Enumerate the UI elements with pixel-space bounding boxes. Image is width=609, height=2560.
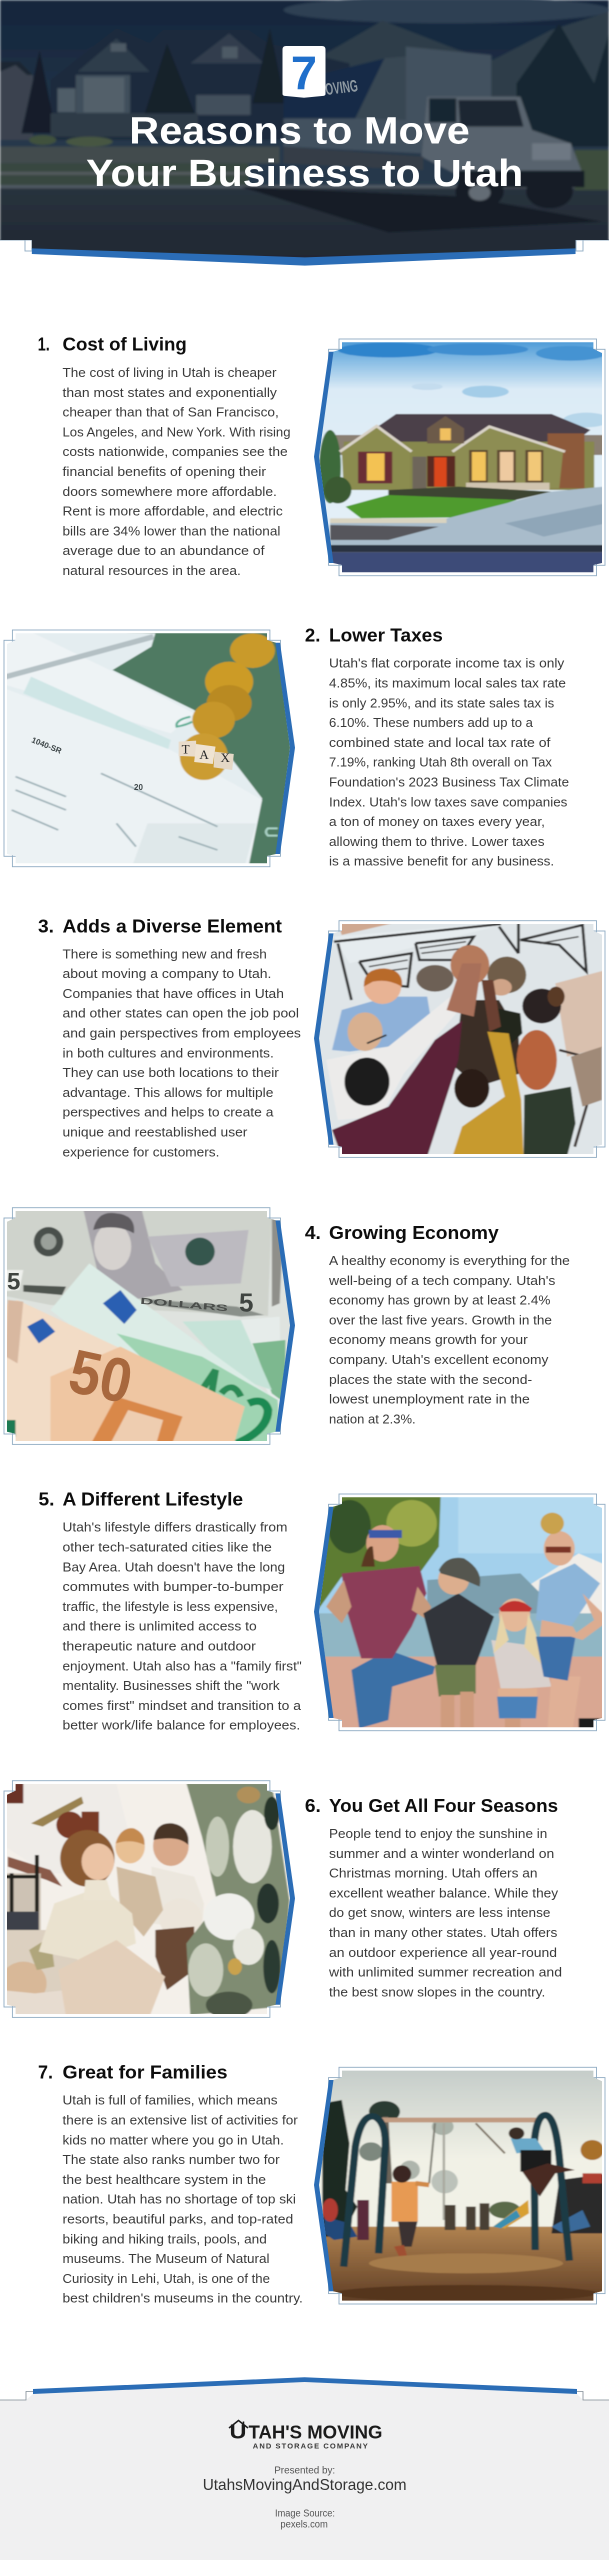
title <box>86 110 523 195</box>
photo frame: house <box>311 337 609 577</box>
body text <box>62 1520 302 1733</box>
blue chevron <box>314 1507 334 1718</box>
body text: Curiosity in Lehi, Utah, is one of the <box>62 2271 270 2286</box>
heading: Cost of Living <box>62 335 187 355</box>
photo: children on swings <box>311 2067 609 2307</box>
section 3: adds a diverse element <box>38 916 609 1160</box>
body text: an outdoor experience all year-round <box>329 1945 557 1960</box>
body text: economy means growth for your <box>329 1332 529 1347</box>
blue chevron <box>314 352 334 563</box>
body text: best children's museums in the country. <box>62 2291 303 2306</box>
body text: They can use both locations to their <box>62 1065 280 1080</box>
body text: bills are 34% lower than the national <box>62 523 281 538</box>
body text: Rent is more affordable, and electric <box>62 504 283 519</box>
body text: lowest unemployment rate in the <box>329 1392 530 1407</box>
body text: economy has grown by at least 2.4% <box>329 1293 551 1308</box>
body text: Utah's flat corporate income tax is only <box>329 656 565 671</box>
body text: average due to an abundance of <box>62 543 265 558</box>
body text: 7.19%, ranking Utah 8th overall on Tax <box>329 755 552 770</box>
body text: experience for customers. <box>62 1144 219 1159</box>
photo frame: tax forms <box>0 627 303 870</box>
heading: You Get All Four Seasons <box>329 1796 558 1816</box>
body text: resorts, beautiful parks, and top-rated <box>62 2211 293 2226</box>
photo: family beside a christmas tree <box>7 1784 290 2014</box>
body text: and gain perspectives from employees <box>62 1025 301 1040</box>
number badge: 7 <box>291 46 317 100</box>
photo: dollar and euro banknotes <box>7 1211 290 1441</box>
body text <box>328 1826 562 1999</box>
body text <box>62 946 301 1159</box>
company logo: U <box>230 2421 246 2443</box>
body text: The cost of living in Utah is cheaper <box>62 365 277 380</box>
blue chevron <box>276 1220 295 1432</box>
body text: other tech-saturated cities like the <box>62 1539 272 1554</box>
body text: doors somewhere more affordable. <box>62 484 277 499</box>
photo frame: banknotes <box>0 1203 303 1450</box>
section 2: lower taxes <box>0 626 569 870</box>
tax letters: T <box>182 742 190 757</box>
body text: Index. Utah's low taxes save companies <box>329 794 568 809</box>
blue chevron <box>314 2080 334 2291</box>
heading: 3. <box>38 916 54 936</box>
company logo <box>229 2420 382 2451</box>
heading: 7. <box>38 2063 53 2083</box>
banknote lettering: DOLLARS <box>140 1296 228 1313</box>
banknote lettering: 50 <box>63 1337 138 1417</box>
photo: family posing by a car <box>319 1497 602 1728</box>
body text: excellent weather balance. While they <box>329 1885 559 1900</box>
body text: is a massive benefit for any business. <box>329 854 554 869</box>
body text: 6.10%. These numbers add up to a <box>329 715 534 730</box>
body text: comes first" mindset and transition to a <box>62 1698 302 1713</box>
body text: financial benefits of opening their <box>62 464 267 479</box>
photo: team hands together <box>319 924 602 1154</box>
image source <box>275 2508 335 2530</box>
tax letters: X <box>220 750 230 765</box>
photo frame: team high five <box>311 917 609 1160</box>
section 6: you get all four seasons <box>0 1780 562 2027</box>
footer panel <box>0 2382 609 2560</box>
body text: People tend to enjoy the sunshine in <box>329 1826 547 1841</box>
section 7: great for families <box>38 2063 609 2307</box>
body text: Utah is full of families, which means <box>62 2093 278 2108</box>
heading: Adds a Diverse Element <box>62 916 282 936</box>
company logo: AND STORAGE COMPANY <box>253 2442 368 2451</box>
body text: nation. Utah has no shortage of top ski <box>62 2192 296 2207</box>
photo frame: family outdoors <box>311 1493 609 1740</box>
body text <box>329 656 569 869</box>
form labels: 1040-SR <box>30 736 63 756</box>
footer frame brackets <box>0 2392 609 2400</box>
body text: well-being of a tech company. Utah's <box>328 1273 556 1288</box>
header banner <box>0 0 609 268</box>
body text: a ton of money on taxes every year, <box>329 814 545 829</box>
body text: perspectives and helps to create a <box>62 1105 274 1120</box>
body text: than most states and exponentially <box>62 385 277 400</box>
body text: therapeutic nature and outdoor <box>62 1638 257 1653</box>
tax letters: A <box>199 747 209 762</box>
tax letters <box>182 745 230 762</box>
body text: Christmas morning. Utah offers an <box>329 1866 538 1881</box>
body text: unique and reestablished user <box>62 1124 248 1139</box>
blue chevron <box>276 643 295 854</box>
header photo: moving truck in front of a house <box>0 0 609 268</box>
body text: and there is unlimited access to <box>62 1619 257 1634</box>
heading: 5. <box>38 1490 54 1510</box>
body text: mentality. Businesses shift the "work <box>62 1678 280 1693</box>
body text: commutes with bumper-to-bumper <box>62 1579 284 1594</box>
body text: and other states can open the job pool <box>62 1006 299 1021</box>
body text: kids no matter where you go in Utah. <box>62 2132 284 2147</box>
body text: enjoyment. Utah also has a "family first" <box>62 1658 302 1673</box>
heading: 2. <box>305 626 320 646</box>
body text <box>328 1253 570 1426</box>
header frame lines <box>0 240 609 251</box>
body text: with unlimited summer recreation and <box>328 1965 562 1980</box>
body text: cheaper than that of San Francisco, <box>62 405 279 420</box>
body text <box>62 2093 303 2306</box>
section 5: a different lifestyle <box>38 1490 609 1740</box>
title: Reasons to Move <box>129 110 470 152</box>
body text: combined state and local tax rate of <box>329 735 551 750</box>
body text: the best snow slopes in the country. <box>329 1984 545 1999</box>
body text: advantage. This allows for multiple <box>62 1085 273 1100</box>
banknote lettering: 5 <box>239 1288 253 1318</box>
body text <box>62 365 290 578</box>
website: UtahsMovingAndStorage.com <box>203 2477 407 2494</box>
presented by: Presented by: <box>274 2464 335 2476</box>
body text: costs nationwide, companies see the <box>62 444 288 459</box>
body text: better work/life balance for employees. <box>62 1718 300 1733</box>
body text: places the state with the second- <box>329 1372 532 1387</box>
body text: traffic, the lifestyle is less expensive, <box>62 1599 278 1614</box>
photo: tax forms and coins <box>7 633 290 864</box>
heading: Great for Families <box>62 2063 228 2083</box>
photo frame: playground <box>311 2067 609 2307</box>
body text: Los Angeles, and New York. With rising <box>62 424 290 439</box>
heading: 4. <box>305 1223 321 1243</box>
section 4: growing economy <box>0 1203 570 1450</box>
banknote lettering <box>8 1273 253 1402</box>
body text: do get snow, winters are less intense <box>329 1905 550 1920</box>
truck lettering: OVING <box>324 77 359 99</box>
body text: summer and a winter wonderland on <box>329 1846 554 1861</box>
footer blue band <box>33 2377 577 2394</box>
body text: nation at 2.3%. <box>329 1411 416 1426</box>
title: Your Business to Utah <box>86 153 523 195</box>
body text: There is something new and fresh <box>62 946 267 961</box>
body text: Companies that have offices in Utah <box>62 986 284 1001</box>
image source: pexels.com <box>280 2519 328 2530</box>
photo frame: family at christmas <box>0 1780 303 2027</box>
body text: The state also ranks number two for <box>62 2152 280 2167</box>
form labels <box>30 736 143 792</box>
heading: 6. <box>305 1796 321 1816</box>
body text: Bay Area. Utah doesn't have the long <box>62 1559 285 1574</box>
body text: 4.85%, its maximum local sales tax rate <box>329 676 566 691</box>
body text: A healthy economy is everything for the <box>329 1253 570 1268</box>
photo: suburban house <box>311 337 609 577</box>
tax letter blocks <box>179 741 234 770</box>
banknote lettering: 5 <box>7 1269 20 1296</box>
heading: Growing Economy <box>329 1223 499 1243</box>
body text: museums. The Museum of Natural <box>62 2251 270 2266</box>
blue chevron <box>276 1793 295 2005</box>
heading: 1. <box>38 335 50 355</box>
body text: over the last five years. Growth in the <box>329 1312 552 1327</box>
body text: the best healthcare system in the <box>62 2172 266 2187</box>
body text: company. Utah's excellent economy <box>329 1352 549 1367</box>
body text: is only 2.95%, and its state sales tax is <box>329 695 555 710</box>
body text: allowing them to thrive. Lower taxes <box>329 834 545 849</box>
heading: A Different Lifestyle <box>62 1490 243 1510</box>
footer <box>0 2377 609 2560</box>
body text: in both cultures and environments. <box>62 1045 274 1060</box>
body text: Utah's lifestyle differs drastically from <box>62 1520 287 1535</box>
body text: biking and hiking trails, pools, and <box>62 2231 267 2246</box>
body text: there is an extensive list of activities for <box>62 2112 298 2127</box>
body text: natural resources in the area. <box>62 563 241 578</box>
header blue band <box>32 248 576 266</box>
form labels: 20 <box>134 783 143 792</box>
blue chevron <box>314 933 334 1145</box>
body text: about moving a company to Utah. <box>62 966 271 981</box>
body text: than in many other states. Utah offers <box>329 1925 558 1940</box>
body text: Foundation's 2023 Business Tax Climate <box>329 775 569 790</box>
number badge <box>282 46 326 100</box>
image source: Image Source: <box>275 2508 335 2519</box>
section 1: cost of living <box>38 335 609 578</box>
heading: Lower Taxes <box>329 626 443 646</box>
company logo: TAH'S MOVING <box>248 2421 382 2442</box>
